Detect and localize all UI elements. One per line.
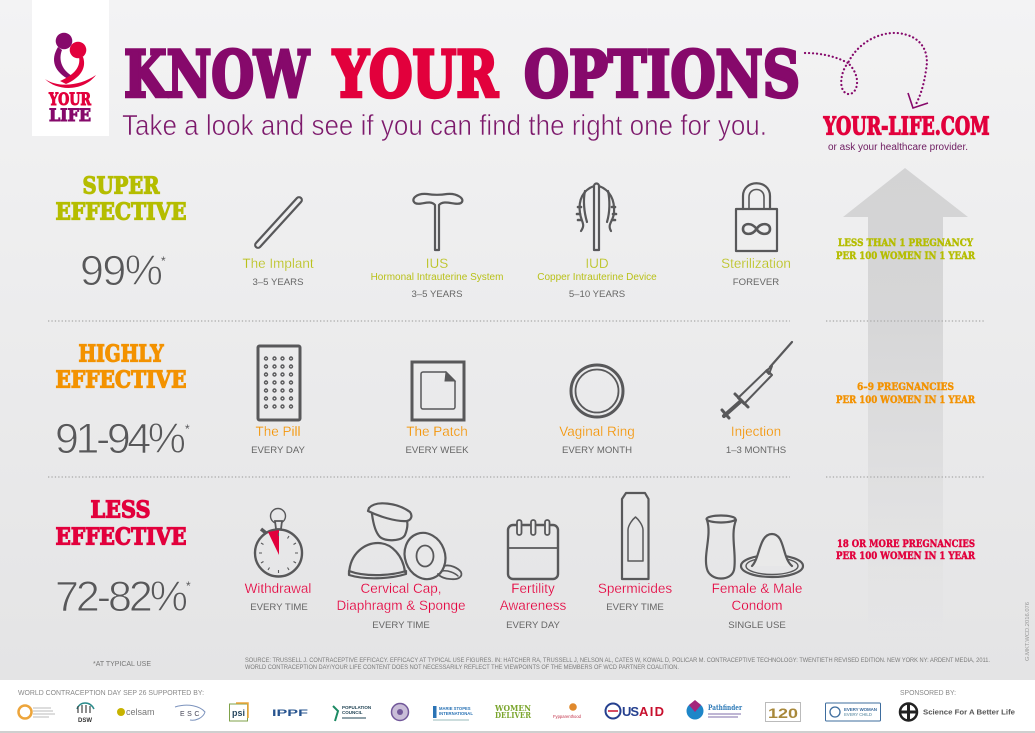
method: pill: EVERY DAY	[251, 445, 306, 456]
healthcare provider note: or ask your healthcare provider.	[828, 142, 968, 153]
method: fertility awareness: Awareness	[500, 598, 567, 613]
method: implant: The Implant	[242, 256, 314, 271]
stat: 91-94%: 91-94%	[55, 415, 186, 463]
method: withdrawal: EVERY TIME	[250, 602, 308, 613]
icon: syringe	[722, 342, 792, 418]
logo: USAID	[606, 704, 664, 719]
method: IUS: Hormonal Intrauterine System	[371, 272, 503, 283]
title: KNOW	[124, 38, 310, 112]
logo: Population Council: COUNCIL	[342, 710, 363, 715]
logo: Marie Stopes: INTERNATIONAL	[439, 711, 473, 716]
stat: 91-94%: *	[185, 422, 190, 436]
logo: USAID: AID	[639, 704, 664, 719]
sponsor heading: SPONSORED BY:	[900, 688, 956, 697]
logo: USAID: US	[622, 704, 639, 719]
logo: Population Council: POPULATION	[342, 705, 371, 710]
icon: pill pack	[258, 346, 300, 420]
logo: celsam: celsam	[126, 707, 155, 717]
logo: Women Deliver: WOMEN	[494, 703, 531, 713]
footnote: at typical use: *AT TYPICAL USE	[93, 659, 151, 668]
method: fertility awareness: Fertility	[511, 581, 555, 596]
logo: Women Deliver: DELIVER	[495, 710, 531, 720]
logo: psi	[230, 703, 248, 721]
logo: Pathfinder: Pathfinder	[708, 703, 742, 712]
icon: spermicide applicator	[622, 493, 648, 579]
callout: super effective pregnancies: LESS THAN 1 PREGNANCY	[838, 237, 973, 249]
logo: IPPF: IPPF	[272, 708, 309, 718]
method: spermicides: EVERY TIME	[606, 602, 664, 613]
logo: 120: 120	[768, 705, 798, 721]
logo: Your Life: YOUR	[48, 90, 92, 110]
logo: Marie Stopes	[433, 706, 473, 720]
method: patch: The Patch	[406, 424, 468, 439]
method: pill	[251, 346, 306, 456]
logo: DSW	[77, 703, 94, 724]
logo: DSW: DSW	[78, 718, 92, 724]
logo: Every Woman Every Child: EVERY CHILD	[844, 712, 873, 717]
logo: FP association: Fypparenthood	[553, 714, 581, 719]
callout: super effective pregnancies: PER 100 WOMEN IN 1 YEAR	[836, 250, 975, 262]
method: IUD	[537, 184, 657, 300]
stat: 99%: 99%	[80, 247, 163, 295]
divider lines	[48, 321, 985, 477]
logo: 120	[766, 702, 800, 722]
logo: sponsor	[899, 703, 1015, 721]
method: cervical cap, diaphragm and sponge: EVERY TIME	[372, 620, 430, 631]
logo: Pathfinder	[686, 700, 742, 720]
logo: psi: psi	[232, 708, 245, 718]
method: IUD: IUD	[585, 256, 609, 271]
callout: highly effective pregnancies: PER 100 WOMEN IN 1 YEAR	[836, 394, 975, 406]
callout: less effective pregnancies	[836, 538, 975, 562]
callout: less effective pregnancies: PER 100 WOMEN IN 1 YEAR	[836, 550, 975, 562]
subtitle: Take a look and see if you can find the right one for you.	[122, 110, 767, 142]
method: withdrawal: Withdrawal	[245, 581, 311, 596]
method: cervical cap, diaphragm and sponge: Cervical Cap,	[360, 581, 442, 596]
method: pill: The Pill	[255, 424, 301, 439]
logo: Population Council	[333, 705, 371, 721]
panel: highly effective	[55, 340, 975, 463]
method: sterilization: FOREVER	[733, 277, 779, 288]
method: cervical cap, diaphragm and sponge: Diaphragm & Sponge	[336, 598, 466, 613]
heading: highly effective	[56, 340, 186, 394]
icon: calendar	[508, 520, 558, 579]
icon: patch	[412, 362, 464, 420]
method: vaginal ring: Vaginal Ring	[559, 424, 635, 439]
method: sterilization	[721, 183, 791, 288]
source text	[245, 657, 990, 671]
icon: T-shaped IUS	[413, 194, 462, 250]
method: patch	[405, 362, 469, 456]
heading: super effective: SUPER	[82, 172, 160, 200]
logo: FP association	[553, 703, 581, 719]
icon: cap, diaphragm and sponge	[349, 503, 461, 585]
source text: WORLD CONTRACEPTION DAY/YOUR LIFE CONTENT DOES NOT NECESSARILY REFLECT THE VIEWPOINTS OF THE MEMBERS OF WCD PARTNER COALITION.	[245, 664, 679, 671]
document code: G.MKT.WCD.2016.076	[1025, 602, 1031, 661]
method: fertility awareness	[500, 520, 567, 631]
heading: less effective: LESS	[90, 496, 150, 524]
method: injection	[722, 342, 792, 456]
title: YOUR	[332, 38, 499, 112]
logo: Every Woman Every Child	[826, 703, 880, 721]
method: injection: 1–3 MONTHS	[726, 445, 786, 456]
logo: ESC: ESC	[180, 711, 202, 718]
callout: less effective pregnancies: 18 OR MORE PREGNANCIES	[837, 538, 975, 550]
icon: stopwatch	[255, 508, 302, 576]
callout: super effective pregnancies	[836, 237, 975, 262]
method: female and male condom: Condom	[731, 598, 783, 613]
method: IUS: 3–5 YEARS	[411, 289, 463, 300]
method: fertility awareness: EVERY DAY	[506, 620, 561, 631]
method: vaginal ring	[559, 365, 635, 456]
method: injection: Injection	[731, 424, 781, 439]
method: female and male condom: SINGLE USE	[728, 620, 786, 631]
stat: 72-82%: 72-82%	[55, 573, 188, 621]
method: implant: 3–5 YEARS	[252, 277, 304, 288]
logo: Women Deliver	[494, 703, 531, 720]
heading: super effective: EFFECTIVE	[56, 198, 186, 226]
method: IUD: 5–10 YEARS	[569, 289, 625, 300]
heading: highly effective: EFFECTIVE	[56, 366, 186, 394]
icon: padlock with infinity	[736, 183, 777, 251]
supporters heading: WORLD CONTRACEPTION DAY SEP 26 SUPPORTED BY:	[18, 688, 204, 697]
method: sterilization: Sterilization	[721, 256, 791, 271]
stat: 72-82%: *	[186, 579, 191, 593]
partner logos	[18, 700, 880, 724]
method: spermicides: Spermicides	[598, 581, 672, 596]
method: female and male condom: Female & Male	[712, 581, 802, 596]
heading: super effective	[56, 172, 186, 226]
panel: less effective	[55, 493, 975, 631]
logo: ESC	[175, 705, 205, 720]
callout: highly effective pregnancies	[836, 381, 975, 406]
method: vaginal ring: EVERY MONTH	[562, 445, 632, 456]
title	[124, 38, 800, 112]
icon: copper IUD	[577, 184, 616, 250]
stat: 99%: *	[161, 254, 166, 268]
heading: less effective: EFFECTIVE	[56, 522, 186, 550]
method: IUS	[371, 194, 503, 300]
logo: Every Woman Every Child: EVERY WOMAN	[844, 707, 877, 712]
logo: Marie Stopes: MARIE STOPES	[439, 706, 471, 711]
method: IUD: Copper Intrauterine Device	[537, 272, 657, 283]
method: IUS: IUS	[426, 256, 448, 271]
method: patch: EVERY WEEK	[405, 445, 469, 456]
logo: Your Life	[32, 0, 109, 136]
heading: highly effective: HIGHLY	[78, 340, 164, 368]
arrow: effectiveness scale	[843, 168, 968, 640]
method: withdrawal	[245, 508, 311, 613]
method: spermicides	[598, 493, 672, 613]
arrow: dotted link to website	[805, 33, 928, 108]
heading: less effective	[56, 496, 186, 550]
callout: highly effective pregnancies: 6–9 PREGNANCIES	[857, 381, 954, 393]
logo: sponsor: Science For A Better Life	[923, 708, 1015, 716]
logo: WCD alliance	[18, 706, 55, 718]
logo: purple seal	[392, 704, 408, 720]
icon: ring	[571, 365, 623, 417]
icon: condoms	[706, 516, 803, 579]
logo: Your Life: LIFE	[49, 106, 91, 126]
method: cervical cap, diaphragm and sponge	[336, 503, 466, 631]
method: implant	[242, 197, 314, 288]
panel: super effective	[56, 172, 975, 300]
title: OPTIONS	[524, 38, 800, 112]
icon: implant rod	[255, 197, 302, 248]
method: female and male condom	[706, 516, 803, 631]
